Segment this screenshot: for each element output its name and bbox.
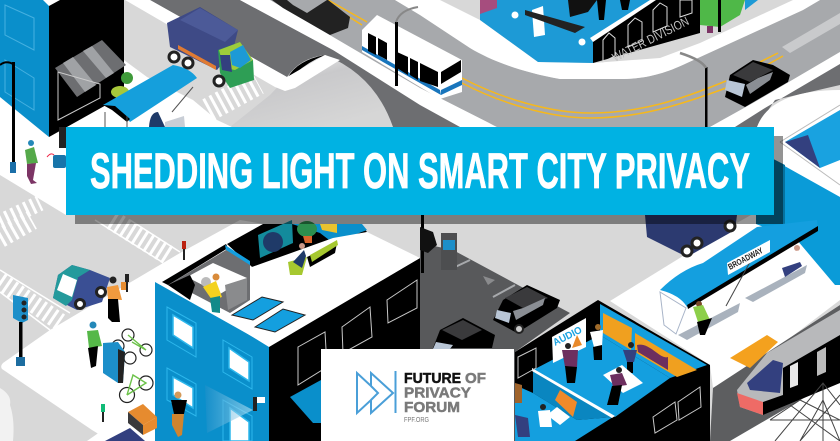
- broadway shelter: BROADWAY: [726, 245, 765, 272]
- street people, bikes and station: [13, 215, 457, 441]
- lower sidewalk: [1, 220, 300, 441]
- cyclist: [90, 322, 96, 328]
- blue awning: [290, 380, 321, 423]
- garbage truck: [167, 7, 254, 88]
- black suv: [725, 60, 790, 107]
- pedestrian with phone: [25, 127, 66, 184]
- lab building: [480, 0, 758, 65]
- black wall windows: [518, 348, 701, 433]
- broadway shelter: [660, 220, 818, 340]
- meters: [125, 274, 129, 282]
- kitchen: [168, 250, 250, 313]
- white self-driving car: [87, 420, 147, 441]
- solar panels: [232, 297, 283, 320]
- lower right white platform: [610, 165, 840, 388]
- center-right truck under banner: [645, 215, 737, 257]
- traffic light: [13, 295, 28, 323]
- parking kiosk and pole: [441, 233, 457, 270]
- logo panel: PRIVACY: [404, 384, 471, 402]
- logo panel: FORUM: [404, 399, 460, 416]
- street lamp left: [12, 62, 15, 168]
- bike dock: [103, 342, 125, 383]
- dark underpass road: [150, 0, 500, 127]
- window peeper: [171, 392, 187, 437]
- parked black cars: [420, 227, 560, 349]
- yellow road lines: [322, 0, 783, 118]
- orange maps: [603, 313, 632, 350]
- banner shadow: [75, 136, 783, 224]
- wall art: [258, 220, 293, 258]
- camera beam: [205, 385, 253, 433]
- right blue building and skylight: [756, 90, 840, 285]
- white curb strip: [125, 0, 340, 91]
- water division sign: WATER DIVISION: [610, 14, 691, 65]
- crosswalks: [0, 83, 258, 330]
- tactile yellow mat: [730, 335, 778, 368]
- crosswalk gray strip: [782, 13, 840, 53]
- banner: [66, 127, 774, 215]
- parking lot: [420, 243, 570, 441]
- green tree: [700, 0, 745, 27]
- icon: fast-forward chevrons: [357, 373, 393, 413]
- back wall and roof: [227, 224, 367, 267]
- broadway sign: [727, 240, 770, 275]
- pylon lattice: [770, 383, 840, 441]
- control room building: [515, 300, 710, 441]
- curved road: [270, 0, 840, 127]
- logo panel: [321, 349, 514, 441]
- blue face windows: [167, 307, 252, 441]
- people: [595, 324, 601, 330]
- black car top: [272, 0, 350, 35]
- left sidewalk: [0, 60, 232, 215]
- road curbs: [395, 0, 820, 79]
- teal car: [53, 265, 110, 310]
- smoke blob: [0, 388, 14, 441]
- street lamp on curve: [680, 53, 708, 127]
- center building: [155, 220, 420, 441]
- logo panel: FPF.ORG: [404, 417, 429, 424]
- building: top left blue and black: [0, 0, 133, 173]
- parking sign box: [128, 404, 157, 425]
- bikes: [112, 329, 153, 402]
- awning: [55, 40, 126, 97]
- tunnel arch: [230, 55, 393, 127]
- bus shelter top: [103, 65, 197, 127]
- computer desk: [555, 390, 577, 417]
- logo text: FUTURE: [404, 370, 461, 387]
- hedge: [121, 72, 133, 84]
- couch and person: [307, 243, 337, 267]
- train: [737, 310, 840, 415]
- black face windows: [298, 280, 417, 385]
- logo panel: OF: [465, 370, 486, 387]
- control room building: AUDIO: [551, 325, 584, 349]
- woman with tablet: [110, 276, 116, 284]
- audio screen: [552, 318, 586, 363]
- white bus: [362, 7, 462, 99]
